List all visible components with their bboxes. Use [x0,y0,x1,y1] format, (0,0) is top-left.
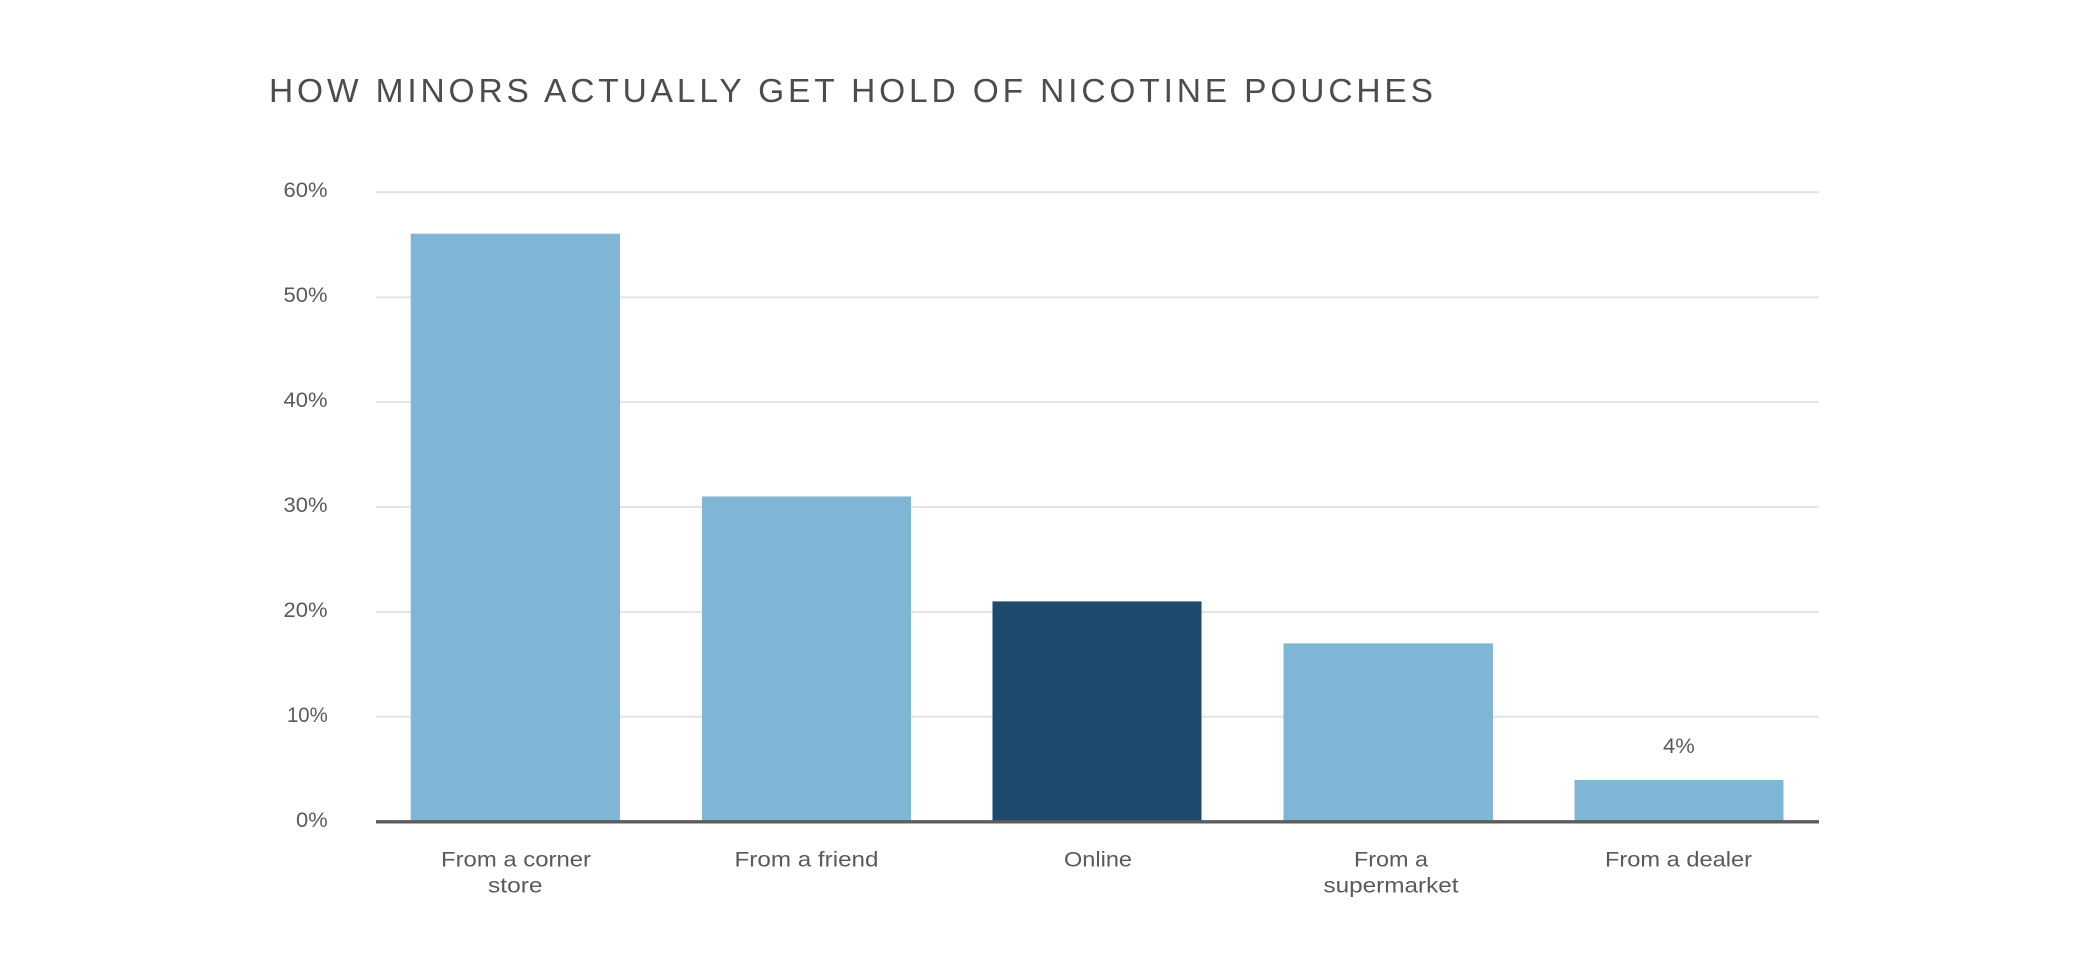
bar: online, 21% [992,601,1202,822]
category label: online: Online [1064,848,1132,872]
title: HOW MINORS ACTUALLY GET HOLD OF NICOTINE POUCHES [269,73,1433,110]
category label: from a corner store: From a corner [441,848,591,872]
bar chart [284,179,1819,898]
y axis labels [284,179,328,832]
bar: from a supermarket, 17% [1284,643,1493,822]
category label: from a corner store: store [488,874,542,898]
y axis labels: 30% [284,494,328,517]
y axis labels: 0% [296,809,328,832]
category label: from a supermarket [1324,848,1459,898]
y axis labels: 50% [284,284,328,307]
y axis labels: 60% [284,179,328,202]
category label: from a supermarket: supermarket [1324,874,1459,898]
category label: from a friend: From a friend [734,848,878,872]
bar: from a corner store, 56% [411,234,620,822]
category label: from a supermarket: From a [1354,848,1428,872]
y axis labels: 40% [284,389,328,412]
category label: from a dealer: From a dealer [1605,848,1752,872]
x axis line [376,820,1819,823]
y axis labels: 10% [287,704,328,727]
category label: from a corner store [441,848,591,898]
bar: from a dealer, 4% [1574,780,1784,822]
data label: 4%: 4% [1663,735,1695,758]
y axis labels: 20% [284,599,328,622]
bar: from a friend, 31% [702,496,911,822]
